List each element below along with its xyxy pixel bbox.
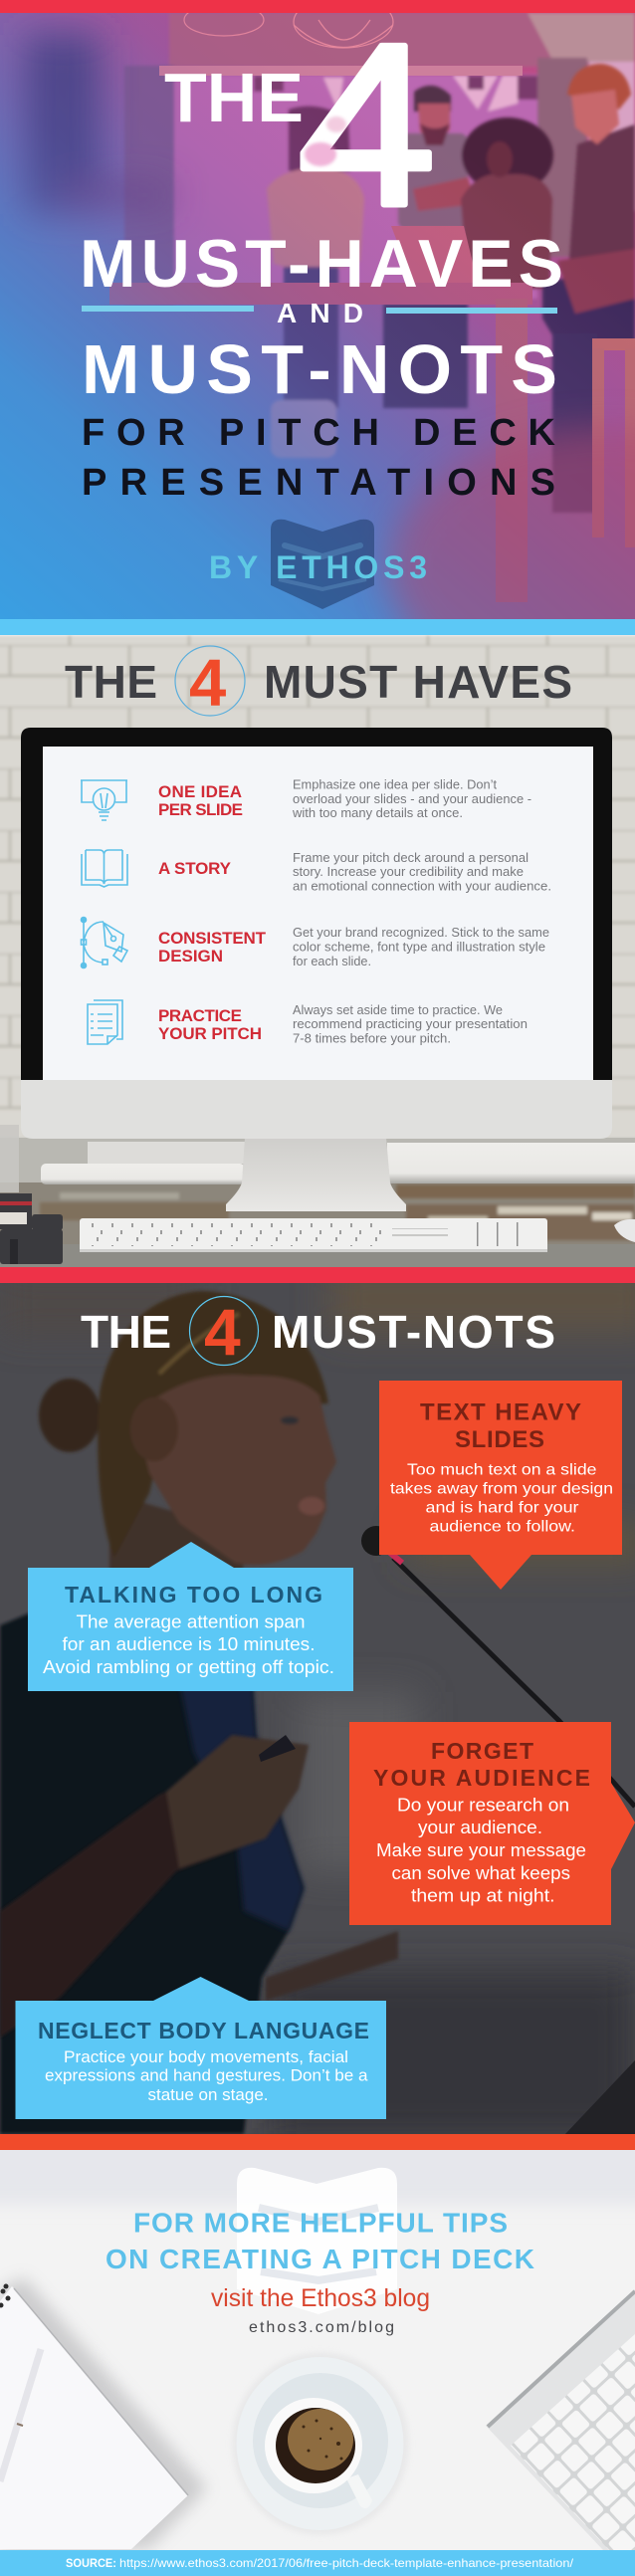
callout: forget your audience: your audience.	[418, 1818, 542, 1837]
title: YOUR PITCH	[158, 1024, 262, 1043]
speaker sweater highlight	[179, 1691, 307, 1932]
coffee cup on saucer	[232, 2352, 409, 2535]
callout: neglect body language: NEGLECT BODY LANGUAGE	[38, 2018, 369, 2043]
monitor screen	[43, 747, 593, 1080]
description: story. Increase your credibility and make	[293, 864, 524, 879]
icon: document stack	[88, 1000, 122, 1044]
monitor	[21, 728, 612, 1211]
icon: ghost white shield logo	[237, 2168, 397, 2314]
panel: blog call to action	[0, 2130, 635, 2550]
description: Emphasize one idea per slide. Don’t	[293, 777, 497, 792]
description: overload your slides - and your audience -	[293, 791, 531, 806]
hero background photo with pink-blue duotone	[0, 13, 635, 619]
speaker neck and back	[107, 1501, 245, 1568]
subtitle line: FOR PITCH DECK: FOR PITCH DECK	[82, 412, 556, 454]
callout: forget your audience	[349, 1722, 635, 1925]
woman with afro	[462, 117, 553, 193]
mouse	[614, 1219, 635, 1242]
source bar	[0, 2550, 635, 2576]
monitor bezel	[21, 728, 612, 1080]
background: brick wall and desk	[0, 635, 635, 1267]
heading: THE 4 MUST-NOTS: 4	[204, 1295, 241, 1369]
description: an emotional connection with your audience.	[293, 878, 551, 894]
background: white desk photo	[0, 2130, 635, 2550]
title: ONE IDEA	[158, 782, 242, 801]
top red bar	[0, 0, 635, 14]
callout: text heavy slides: SLIDES	[455, 1426, 544, 1453]
speaker ear	[130, 1397, 178, 1461]
callout: text heavy slides: TEXT HEAVY	[420, 1399, 581, 1425]
background: speaker photo	[0, 1264, 635, 2140]
icon: Ethos3 shield logo	[271, 520, 374, 609]
icon: projector with lightbulb	[81, 780, 127, 820]
speaker features	[281, 1416, 299, 1424]
description: recommend practicing your presentation	[293, 1016, 528, 1031]
source bar: SOURCE:	[66, 2556, 116, 2570]
callout: neglect body language	[16, 1977, 386, 2119]
blue bar	[0, 619, 635, 635]
divider lines	[82, 306, 557, 314]
desk objects: black notebooks	[0, 1193, 63, 1264]
speaker hair	[39, 1379, 101, 1452]
callout: forget your audience: can solve what keeps	[392, 1863, 570, 1883]
icon: open book	[82, 850, 127, 887]
man in checked shirt	[569, 124, 635, 274]
callout: text heavy slides: and is hard for your	[426, 1499, 579, 1517]
speaker face	[134, 1375, 336, 1565]
callout: text heavy slides: Too much text on a slide	[407, 1461, 597, 1479]
title line: AND: AND	[277, 298, 363, 328]
callout: talking too long: Avoid rambling or getting off topic.	[43, 1657, 334, 1677]
heading: THE 4 MUST-NOTS	[81, 1295, 555, 1369]
link label: visit the Ethos3 blog	[211, 2284, 430, 2312]
title: PER SLIDE	[158, 800, 243, 819]
silver keyboard	[486, 2289, 635, 2550]
byline: BY ETHOS3: BY ETHOS3	[209, 549, 427, 585]
description: Always set aside time to practice. We	[293, 1002, 503, 1017]
title: PRACTICE	[158, 1006, 242, 1025]
item: practice your pitch	[88, 1000, 528, 1046]
icon: pen tool	[82, 918, 127, 967]
source bar: https://www.ethos3.com/2017/06/free-pitch-deck-template-enhance-presentation/	[119, 2556, 574, 2570]
callout: forget your audience: YOUR AUDIENCE	[373, 1765, 590, 1791]
woman in sweater	[289, 107, 350, 171]
keyboard	[80, 1218, 547, 1252]
subtitle line: PRESENTATIONS: PRESENTATIONS	[82, 462, 555, 504]
table and laptop	[391, 226, 473, 283]
speaker sweater	[0, 1603, 304, 2134]
description: 7-8 times before your pitch.	[293, 1031, 451, 1046]
callout: neglect body language: statue on stage.	[147, 2086, 269, 2104]
speaker forearm and hand	[0, 1792, 225, 2037]
panel: the 4 must haves	[0, 635, 635, 1267]
callout: talking too long: The average attention span	[76, 1612, 305, 1632]
heading: THE 4 MUST HAVES: MUST HAVES	[264, 656, 572, 708]
heading line 2: ON CREATING A PITCH DECK	[106, 2244, 534, 2274]
description: Get your brand recognized. Stick to the same	[293, 925, 549, 940]
description: for each slide.	[293, 954, 371, 968]
link url: ethos3.com/blog	[249, 2319, 394, 2336]
callout: talking too long: for an audience is 10 minutes.	[62, 1634, 315, 1654]
callout: neglect body language: Practice your body movements, facial	[64, 2048, 348, 2066]
item: consistent design	[82, 918, 549, 968]
callout: talking too long	[28, 1542, 353, 1691]
bearded man	[398, 133, 468, 229]
callout: forget your audience: Do your research on	[397, 1796, 569, 1816]
description: color scheme, font type and illustration style	[293, 940, 545, 955]
speaker other hand	[266, 1931, 398, 2001]
desk objects: glass	[0, 1125, 19, 1192]
callout: forget your audience: them up at night.	[411, 1885, 555, 1905]
big number 4: 4	[298, 0, 436, 255]
description: with too many details at once.	[292, 805, 463, 820]
title: CONSISTENT	[158, 929, 267, 948]
title: A STORY	[158, 859, 232, 878]
clicker	[259, 1735, 296, 1762]
heading: THE 4 MUST HAVES	[65, 646, 572, 721]
heading: THE 4 MUST-NOTS: THE	[81, 1306, 171, 1358]
monitor chin	[21, 1080, 612, 1139]
callout: text heavy slides	[379, 1381, 622, 1590]
panel: the 4 must-nots	[0, 1264, 635, 2140]
heading: THE 4 MUST HAVES: 4	[189, 646, 226, 721]
callout: text heavy slides: audience to follow.	[430, 1519, 575, 1535]
description: Frame your pitch deck around a personal	[293, 850, 529, 865]
title line: MUST-HAVES: MUST-HAVES	[80, 226, 563, 302]
notebook	[0, 2277, 207, 2549]
callout: forget your audience: Make sure your message	[376, 1840, 586, 1860]
red bar	[0, 1267, 635, 1283]
heading: THE 4 MUST-NOTS: MUST-NOTS	[272, 1306, 555, 1358]
panel: hero	[0, 13, 635, 619]
item: one idea per slide	[81, 777, 531, 820]
callout: text heavy slides: takes away from your design	[390, 1481, 613, 1497]
microphone	[361, 1526, 381, 1556]
item: a story	[82, 850, 551, 894]
rolled paper and box behind monitor	[41, 1142, 635, 1184]
heading line 1: FOR MORE HELPFUL TIPS	[133, 2208, 508, 2238]
orange bar	[0, 2134, 635, 2150]
callout: forget your audience: FORGET	[431, 1738, 533, 1764]
title: DESIGN	[158, 947, 223, 966]
heading: THE 4 MUST HAVES: THE	[65, 656, 157, 708]
callout: talking too long: TALKING TOO LONG	[65, 1582, 322, 1608]
monitor stand	[226, 1138, 406, 1211]
title line: MUST-NOTS: MUST-NOTS	[82, 330, 557, 408]
title line: THE: THE	[164, 59, 304, 136]
callout: neglect body language: expressions and hand gestures. Don’t be a	[45, 2067, 368, 2085]
